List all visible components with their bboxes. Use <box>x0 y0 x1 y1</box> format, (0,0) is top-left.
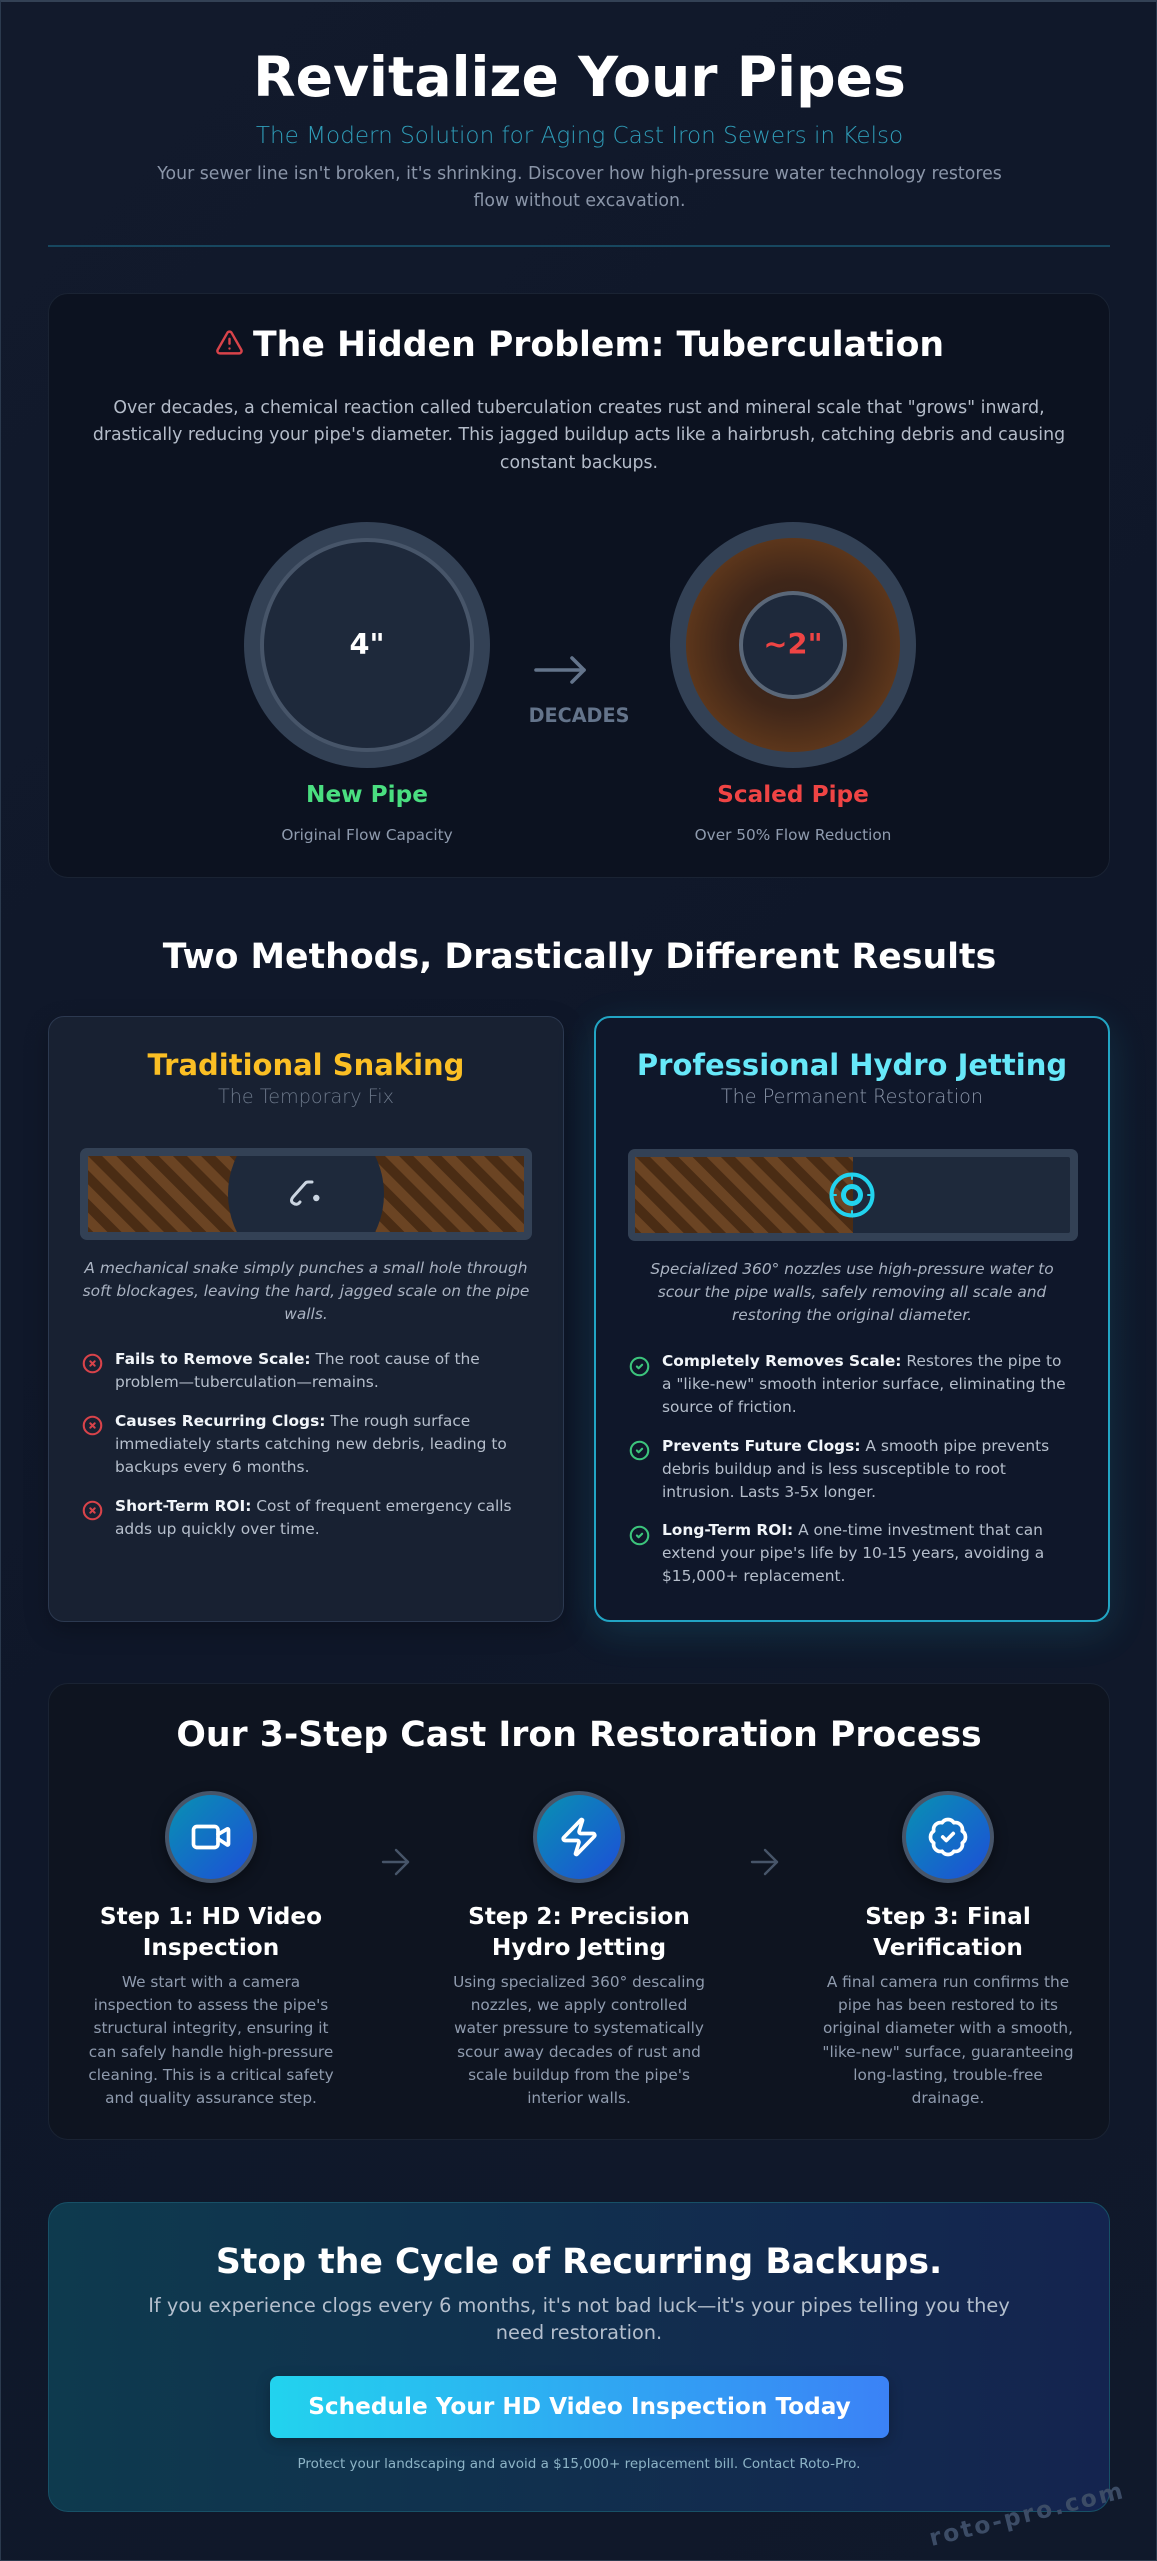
panel: process <box>48 1683 1110 2140</box>
panel: hydro jetting <box>594 1016 1110 1622</box>
drawback 2: immediately starts catching new debris, leading to <box>115 1435 507 1453</box>
problem description: drastically reducing your pipe's diameter. This jagged buildup acts like a hairbrush, catching debris and causing <box>93 425 1065 445</box>
drawback 1: problem—tuberculation—remains. <box>115 1373 379 1391</box>
step 2 text: scour away decades of rust and <box>457 2043 701 2061</box>
step 1 <box>88 1791 334 2107</box>
intro text <box>157 164 1002 211</box>
new pipe size: 4" <box>349 627 385 661</box>
section heading: two methods: Two Methods, Drastically Different Results <box>163 937 996 977</box>
step 3 title: Step 3: Final <box>865 1903 1031 1930</box>
step 1 text: can safely handle high-pressure <box>89 2043 333 2061</box>
button <box>270 2376 889 2438</box>
drawback 1: Fails to Remove Scale: The root cause of the <box>115 1350 480 1368</box>
step 3 title: Verification <box>873 1934 1023 1961</box>
card description: restoring the original diameter. <box>732 1306 972 1324</box>
step 1 title: Step 1: HD Video <box>100 1903 322 1930</box>
watermark: roto-pro.com <box>926 2476 1128 2552</box>
step 1 text: We start with a camera <box>122 1973 300 1991</box>
step 1 text: inspection to assess the pipe's <box>94 1996 328 2014</box>
card description: walls. <box>284 1305 328 1323</box>
step 1 text: and quality assurance step. <box>105 2089 317 2107</box>
fine print: Protect your landscaping and avoid a $15,000+ replacement bill. Contact Roto-Pro. <box>298 2456 860 2472</box>
step 3 text: long-lasting, trouble-free <box>853 2066 1043 2084</box>
step 1 text <box>88 1973 334 2107</box>
arrow: step 2 to 3 <box>750 1848 778 1876</box>
step 2 text: water pressure to systematically <box>454 2019 704 2037</box>
icon: x <box>82 1500 102 1520</box>
step 1 text: cleaning. This is a critical safety <box>88 2066 334 2084</box>
icon: check <box>630 1440 650 1460</box>
benefit 1: source of friction. <box>662 1398 797 1416</box>
step 2 title <box>468 1903 690 1961</box>
step 3 text <box>822 1973 1074 2107</box>
process heading: Our 3-Step Cast Iron Restoration Process <box>176 1715 982 1755</box>
benefit 3: extend your pipe's life by 10-15 years, avoiding a <box>662 1544 1044 1562</box>
benefit 1: a "like-new" smooth interior surface, eliminating the <box>662 1375 1066 1393</box>
benefit 2 <box>662 1437 1049 1501</box>
card subtitle: The Permanent Restoration <box>721 1085 983 1108</box>
benefit 2: intrusion. Lasts 3-5x longer. <box>662 1483 876 1501</box>
icon: new pipe circle <box>244 522 490 768</box>
scaled pipe size: ~2" <box>763 627 823 661</box>
diagram: new pipe <box>244 522 490 844</box>
card title: Traditional Snaking <box>148 1048 464 1082</box>
benefit 3 <box>662 1521 1044 1585</box>
pipe illustration <box>80 1148 532 1240</box>
icon: warning triangle <box>216 330 243 355</box>
intro text: Your sewer line isn't broken, it's shrinking. Discover how high-pressure water technology restores <box>157 164 1002 184</box>
scaled pipe label: Scaled Pipe <box>717 781 869 808</box>
step 1 title <box>100 1903 322 1961</box>
step 2 <box>453 1791 705 2107</box>
icon: check <box>630 1356 650 1376</box>
icon: x <box>82 1354 102 1374</box>
step 3 text: original diameter with a smooth, <box>823 2019 1073 2037</box>
cta text: If you experience clogs every 6 months, it's not bad luck—it's your pipes telling you they <box>148 2294 1010 2317</box>
step 3 text: pipe has been restored to its <box>838 1996 1058 2014</box>
drawback 2 <box>115 1412 507 1476</box>
step 2 text: scale buildup from the pipe's <box>468 2066 690 2084</box>
card description <box>650 1260 1054 1324</box>
problem description <box>93 398 1065 473</box>
icon: x <box>82 1416 102 1436</box>
panel: hidden problem <box>48 293 1110 878</box>
icon: bolt <box>533 1791 625 1883</box>
cta text <box>148 2294 1010 2344</box>
arrow: step 1 to 2 <box>382 1848 410 1876</box>
arrow <box>534 656 586 684</box>
card description: Specialized 360° nozzles use high-pressure water to <box>650 1260 1054 1278</box>
card subtitle: The Temporary Fix <box>218 1085 394 1108</box>
problem description: constant backups. <box>500 453 658 473</box>
icon: check <box>630 1526 650 1546</box>
benefit 3: $15,000+ replacement. <box>662 1567 845 1585</box>
step 2 text: interior walls. <box>527 2089 631 2107</box>
card description: A mechanical snake simply punches a small hole through <box>84 1259 528 1277</box>
arrow: decades <box>529 656 629 727</box>
benefit 2: debris buildup and is less susceptible to root <box>662 1460 1006 1478</box>
icon: scaled pipe circle <box>670 522 916 768</box>
drawback 3 <box>115 1497 512 1538</box>
benefit 3: Long-Term ROI: A one-time investment that can <box>662 1521 1043 1539</box>
step 3 <box>822 1791 1074 2107</box>
benefit 2: Prevents Future Clogs: A smooth pipe prevents <box>662 1437 1049 1455</box>
list: benefits <box>630 1352 1066 1585</box>
step 3 text: drainage. <box>912 2089 984 2107</box>
panel: traditional snaking <box>48 1016 564 1622</box>
step 3 text: A final camera run confirms the <box>827 1973 1069 1991</box>
decades label: DECADES <box>529 704 629 727</box>
problem description: Over decades, a chemical reaction called tuberculation creates rust and mineral scale that "grows" inward, <box>113 398 1045 418</box>
pipe illustration <box>628 1149 1078 1241</box>
step 1 title: Inspection <box>143 1934 279 1961</box>
drawback 2: backups every 6 months. <box>115 1458 309 1476</box>
card description: soft blockages, leaving the hard, jagged scale on the pipe <box>83 1282 529 1300</box>
list: drawbacks <box>82 1350 512 1538</box>
cta text: need restoration. <box>496 2321 662 2344</box>
card description: scour the pipe walls, safely removing all scale and <box>658 1283 1046 1301</box>
new pipe caption: Original Flow Capacity <box>281 826 453 844</box>
new pipe label: New Pipe <box>306 781 428 808</box>
step 2 text: Using specialized 360° descaling <box>453 1973 705 1991</box>
icon: badge check <box>902 1791 994 1883</box>
benefit 1: Completely Removes Scale: Restores the pipe to <box>662 1352 1061 1370</box>
heading text: The Hidden Problem: Tuberculation <box>253 325 944 365</box>
step 1 text: structural integrity, ensuring it <box>93 2019 329 2037</box>
icon: video <box>165 1791 257 1883</box>
subtitle: The Modern Solution for Aging Cast Iron Sewers in Kelso <box>256 123 903 149</box>
step 2 text: nozzles, we apply controlled <box>471 1996 687 2014</box>
step 2 text <box>453 1973 705 2107</box>
panel: call to action <box>48 2202 1110 2512</box>
cta heading: Stop the Cycle of Recurring Backups. <box>216 2242 942 2282</box>
title: Revitalize Your Pipes <box>253 46 906 110</box>
button: Schedule Your HD Video Inspection Today <box>308 2393 851 2420</box>
drawback 3: Short-Term ROI: Cost of frequent emergency calls <box>115 1497 512 1515</box>
card description <box>82 1259 529 1323</box>
header <box>157 46 1002 211</box>
step 2 title: Hydro Jetting <box>492 1934 666 1961</box>
step 3 text: "like-new" surface, guaranteeing <box>822 2043 1074 2061</box>
card title: Professional Hydro Jetting <box>637 1048 1067 1082</box>
drawback 3: adds up quickly over time. <box>115 1520 320 1538</box>
benefit 1 <box>662 1352 1066 1416</box>
panel heading <box>216 325 944 365</box>
scaled pipe caption: Over 50% Flow Reduction <box>695 826 891 844</box>
drawback 2: Causes Recurring Clogs: The rough surface <box>115 1412 470 1430</box>
intro text: flow without excavation. <box>473 191 686 211</box>
diagram: scaled pipe <box>670 522 916 844</box>
drawback 1 <box>115 1350 480 1391</box>
step 2 title: Step 2: Precision <box>468 1903 690 1930</box>
step 3 title <box>865 1903 1031 1961</box>
